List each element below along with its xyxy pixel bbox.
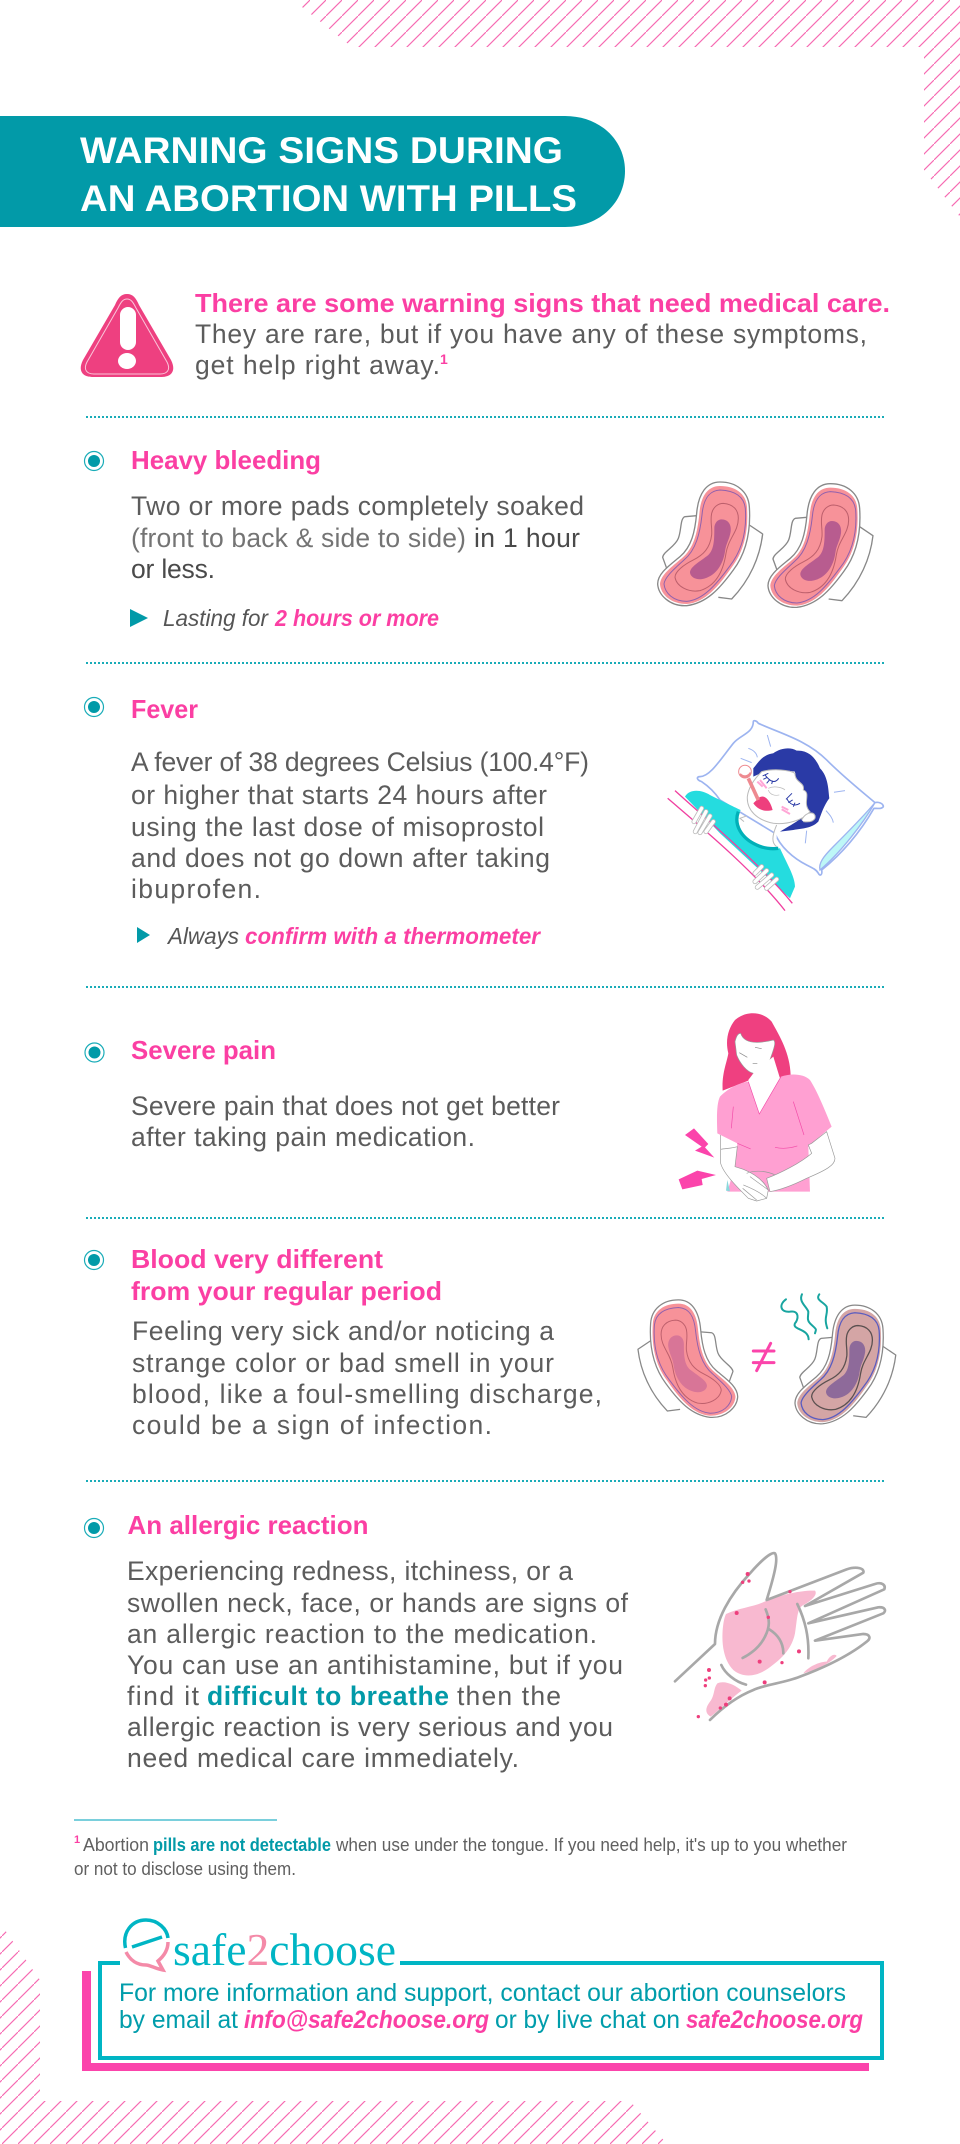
footnote: when use under the tongue. If you need help, it's up to you whether [335, 1835, 847, 1855]
icon: bullet marker [84, 452, 104, 470]
text block: allergic reaction: allergic reaction is very serious and you [127, 1712, 613, 1742]
illustration: normal pad versus different pad [638, 1294, 896, 1424]
text block: allergic reaction [127, 1556, 629, 1773]
contact text: info@safe2choose.org [244, 2006, 489, 2034]
text block: allergic reaction: find it [127, 1681, 200, 1711]
icon: warning triangle [81, 294, 173, 377]
intro text [195, 288, 890, 380]
contact box frame [82, 1963, 882, 2071]
heading: heavy bleeding: Heavy bleeding [131, 445, 321, 475]
contact text: or by live chat on [495, 2006, 680, 2034]
panel: severe pain [85, 1013, 835, 1201]
note: lasting for 2 hours [130, 605, 439, 631]
title banner [0, 116, 625, 227]
footnote: or not to disclose using them. [74, 1859, 296, 1879]
footnote: 1 [74, 1834, 80, 1846]
note: confirm with a thermometer: Always [166, 923, 239, 949]
heading: severe pain: Severe pain [131, 1035, 276, 1065]
text block: allergic reaction: difficult to breathe [207, 1681, 449, 1711]
text block: allergic reaction: swollen neck, face, or hands are signs of [127, 1588, 629, 1618]
icon: bullet marker [84, 698, 104, 716]
footnote: Abortion [83, 1835, 149, 1855]
text block: heavy bleeding: (front to back & side to side) [131, 523, 466, 553]
text block: allergic reaction: You can use an antihistamine, but if you [127, 1650, 623, 1680]
title banner: WARNING SIGNS DURING [80, 130, 563, 171]
panel: blood very different [84, 1244, 896, 1440]
panel: heavy bleeding [84, 445, 873, 631]
text block: fever: A fever of 38 degrees Celsius (100.4°F) [131, 747, 589, 777]
intro text: They are rare, but if you have any of these symptoms, [195, 319, 867, 349]
text block: heavy bleeding: Two or more pads completely soaked [131, 491, 584, 521]
note: lasting for 2 hours: 2 hours or more [274, 605, 439, 631]
text block: heavy bleeding [131, 491, 584, 584]
text block: severe pain: after taking pain medication. [131, 1122, 475, 1152]
heading: fever: Fever [131, 694, 198, 724]
intro text: get help right away. [195, 350, 440, 380]
panel: allergic reaction [84, 1510, 885, 1773]
illustration: two soaked pads [658, 482, 873, 607]
contact text: For more information and support, contact our abortion counselors [119, 1979, 846, 2007]
text block: blood very different: strange color or bad smell in your [132, 1348, 554, 1378]
text block: fever: and does not go down after taking [131, 843, 550, 873]
icon: bullet marker [85, 1043, 104, 1062]
text block: blood very different: could be a sign of infection. [132, 1410, 492, 1440]
text block: severe pain: Severe pain that does not get better [131, 1091, 560, 1121]
text block: allergic reaction: then the [457, 1681, 561, 1711]
note: lasting for 2 hours: Lasting for [163, 605, 269, 631]
text block: fever: or higher that starts 24 hours after [131, 780, 547, 810]
text block: allergic reaction: an allergic reaction to the medication. [127, 1619, 597, 1649]
text block: heavy bleeding: in 1 hour [474, 523, 580, 553]
note: confirm with a thermometer: confirm with a thermometer [245, 923, 541, 949]
title banner: AN ABORTION WITH PILLS [80, 178, 577, 219]
illustration: woman holding abdomen [679, 1013, 835, 1201]
illustration: hand with rash [675, 1553, 885, 1720]
decorative hatch: top right corner [297, 0, 960, 217]
intro text: There are some warning signs that need medical care. [195, 288, 890, 318]
text block: heavy bleeding: or less. [131, 554, 215, 584]
decorative hatch: bottom left corner [0, 1923, 667, 2144]
panel: fever [84, 694, 883, 949]
text block: blood very different: Feeling very sick and/or noticing a [132, 1316, 554, 1346]
illustration: person in bed with thermometer [668, 721, 883, 911]
footnote: pills are not detectable [153, 1835, 331, 1855]
heading: allergic reaction: An allergic reaction [128, 1510, 368, 1540]
footnote [74, 1820, 847, 1879]
heading: blood very different: Blood very different [131, 1244, 383, 1274]
logo: safe2choose: safe2choose [173, 1924, 396, 1975]
text block: allergic reaction: Experiencing redness, itchiness, or a [127, 1556, 573, 1586]
text block: blood very different: blood, like a foul-smelling discharge, [132, 1379, 602, 1409]
text block: allergic reaction: need medical care immediately. [127, 1743, 519, 1773]
text block: severe pain [131, 1091, 560, 1152]
heading: blood very different: from your regular period [131, 1276, 442, 1306]
text block: fever [131, 747, 589, 904]
text block: fever: ibuprofen. [131, 874, 261, 904]
text block: fever: using the last dose of misoprostol [131, 812, 544, 842]
icon: bullet marker [84, 1518, 104, 1538]
text block: blood very different [132, 1316, 602, 1440]
contact text: by email at [119, 2006, 238, 2034]
icon: bullet marker [84, 1250, 104, 1270]
contact text: safe2choose.org [686, 2006, 863, 2034]
heading: blood very different [131, 1244, 442, 1306]
contact text [119, 1979, 863, 2034]
intro text: 1 [440, 351, 448, 367]
